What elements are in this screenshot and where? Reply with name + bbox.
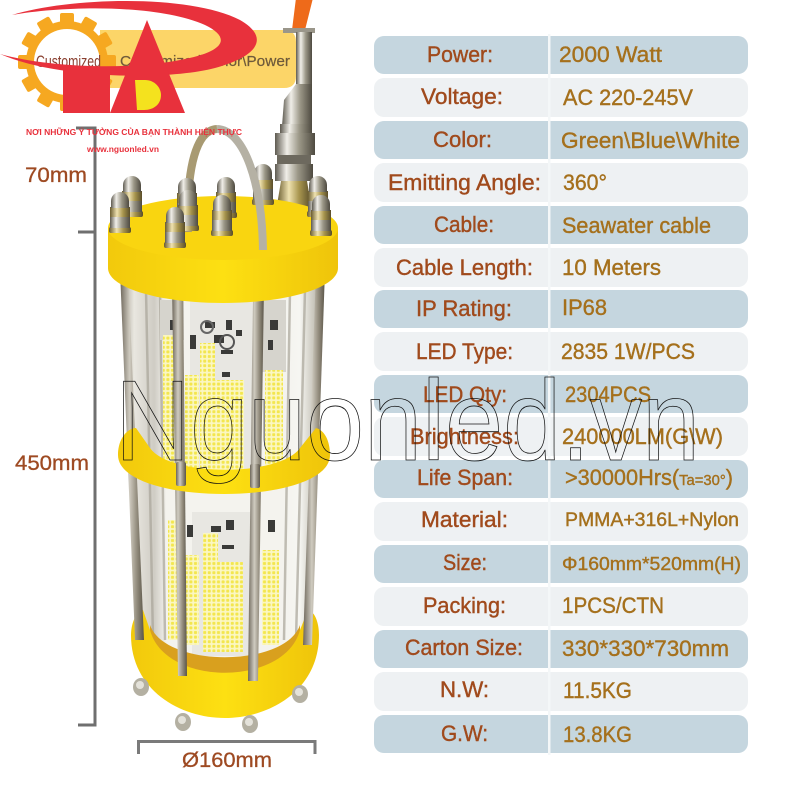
- cable gland: [275, 28, 315, 218]
- cable: [292, 0, 313, 30]
- spec labels: Packing:: [423, 593, 506, 618]
- dimension lines: [15, 128, 315, 772]
- spec labels: IP Rating:: [416, 296, 512, 321]
- spec labels: N.W:: [440, 677, 489, 702]
- label: diameter: Ø160mm: [182, 749, 272, 772]
- logo letter D: [135, 80, 161, 110]
- logo url: www.nguonled.vn: [86, 145, 159, 154]
- spec labels: Size:: [443, 550, 487, 575]
- spec labels: G.W:: [441, 721, 488, 746]
- logo letter T: [63, 68, 110, 113]
- lamp glass body: [122, 270, 324, 660]
- spec labels: Cable:: [434, 212, 494, 237]
- steel rods: [120, 270, 325, 681]
- spec values: AC 220-245V: [563, 85, 693, 110]
- spec labels: Material:: [421, 507, 508, 532]
- spec values: 1PCS/CTN: [562, 593, 664, 618]
- spec values: Green\Blue\White: [561, 128, 740, 153]
- spec labels: Voltage:: [421, 84, 503, 109]
- middle yellow ring: [118, 428, 330, 494]
- spec labels: LED Qty:: [423, 382, 507, 407]
- spec labels: Power:: [427, 42, 493, 67]
- spec values: 13.8KG: [563, 722, 632, 747]
- spec values: Φ160mm*520mm(H): [562, 554, 741, 574]
- spec values: 10 Meters: [562, 255, 661, 280]
- banner text: Customized\Color\Power: [120, 53, 290, 70]
- spec values: 2304PCS: [565, 382, 651, 407]
- watermark: Nguonled.vn: [115, 358, 700, 485]
- spec values: 330*330*730mm: [562, 636, 729, 661]
- bottom feet: [133, 678, 308, 733]
- top yellow disc: [108, 196, 338, 303]
- spec values: 2000 Watt: [559, 42, 662, 67]
- spec values: [559, 42, 741, 747]
- spec labels: Carton Size:: [405, 635, 523, 660]
- LED lamp: [108, 0, 338, 733]
- spec labels: Color:: [433, 127, 492, 152]
- spec values: >30000Hrs(Ta=30°): [565, 465, 733, 490]
- logo swoosh: [0, 1, 257, 76]
- banner: [100, 30, 296, 88]
- spec values: 11.5KG: [563, 678, 632, 703]
- lower LED module: [168, 512, 279, 656]
- spec values: 360°: [563, 170, 607, 195]
- spec labels: Cable Length:: [396, 255, 533, 280]
- spec labels: Brightness:: [410, 424, 519, 449]
- spec labels: Life Span:: [417, 465, 513, 490]
- upper LED module: [160, 300, 286, 490]
- spec labels: Emitting Angle:: [388, 170, 541, 195]
- handle back: [188, 129, 217, 232]
- customized text: Customized: [36, 52, 101, 71]
- table row stripes: [374, 34, 748, 755]
- spec values: IP68: [562, 295, 607, 320]
- glass ribs: [146, 290, 305, 640]
- spec values: PMMA+316L+Nylon: [565, 510, 739, 531]
- logo letter A: [110, 20, 185, 113]
- spec values: 2835 1W/PCS: [561, 339, 695, 364]
- brand logo overlay: [0, 1, 257, 154]
- logo slogan: NƠI NHỮNG Ý TƯỞNG CỦA BẠN THÀNH HIỆN THỰC: [26, 126, 242, 137]
- label: 450mm: 450mm: [15, 452, 89, 475]
- bottom yellow ring: [131, 610, 319, 718]
- handle front: [217, 129, 263, 250]
- gear icon: [18, 13, 116, 111]
- spec table: [374, 34, 748, 755]
- spec labels: LED Type:: [416, 339, 513, 364]
- bolts: [109, 164, 332, 248]
- spec labels: [388, 42, 541, 746]
- label: 70mm: 70mm: [25, 164, 87, 187]
- spec values: 240000LM(G\W): [562, 424, 723, 449]
- customized banner with gear: [18, 13, 296, 111]
- spec values: Seawater cable: [562, 213, 711, 238]
